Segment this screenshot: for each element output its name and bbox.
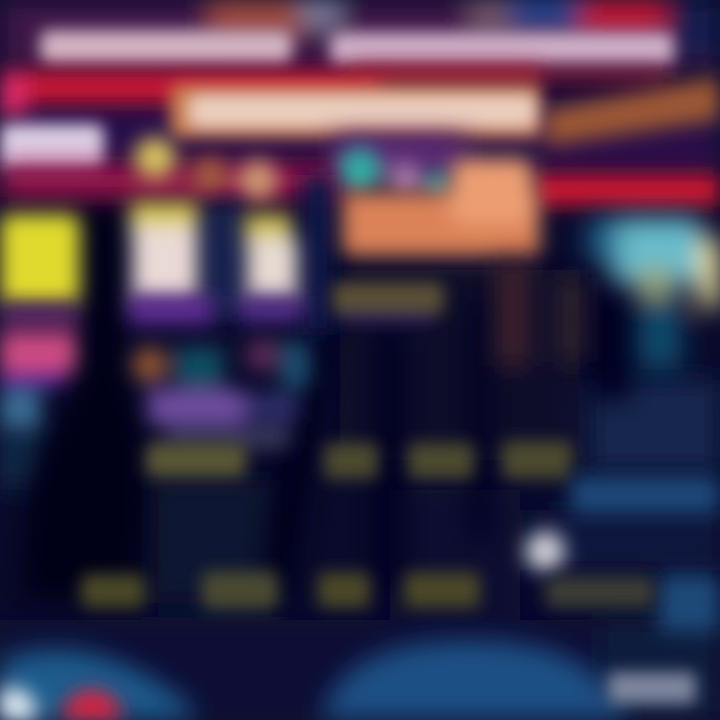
lower background shading (0, 270, 720, 720)
panel: yellow card (0, 214, 80, 306)
black column silhouettes (20, 180, 630, 600)
header backdrop (0, 0, 720, 175)
olive label upper (332, 282, 444, 324)
orange block (342, 158, 540, 256)
title line two (170, 84, 542, 138)
bottom right label (608, 672, 696, 704)
red band right (535, 174, 720, 206)
panel: card two (130, 202, 198, 302)
red ribbon (0, 64, 670, 116)
dark columns (203, 175, 334, 335)
centre stripes (128, 296, 310, 448)
left stripes (0, 304, 80, 428)
magenta band (0, 135, 465, 197)
small coloured dots (134, 137, 452, 200)
title line one (40, 30, 674, 66)
vertical dim columns (498, 262, 584, 366)
white dot (525, 531, 565, 571)
blue panels right (570, 476, 720, 632)
olive labels row one (146, 441, 572, 479)
blue arc bottom left (0, 649, 195, 720)
olive labels row two (81, 571, 654, 609)
orange ribbon (545, 76, 720, 146)
icons bottom left (0, 688, 122, 720)
left label (0, 124, 104, 170)
panel: cyan card (588, 218, 720, 370)
blue arc bottom centre (320, 640, 625, 720)
panel: card three (244, 214, 298, 304)
